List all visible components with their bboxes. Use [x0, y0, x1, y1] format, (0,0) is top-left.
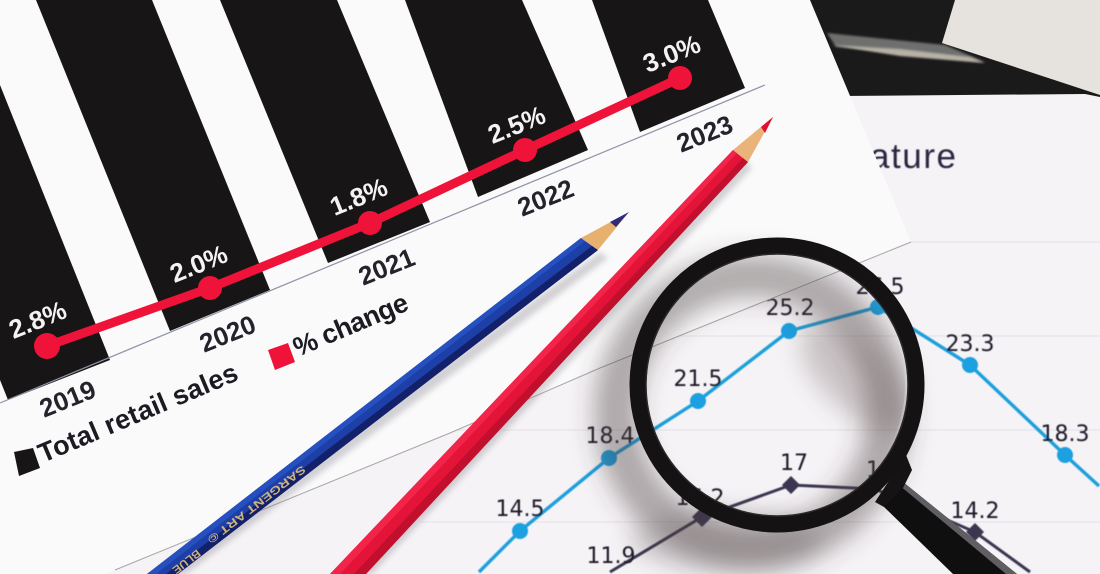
- blue line chart: 25.2: [766, 296, 814, 321]
- pencil highlight facet: [147, 238, 585, 574]
- handle collar: [875, 455, 912, 507]
- blue line chart: 18.3: [1041, 422, 1089, 447]
- pencil lead: [761, 117, 773, 133]
- blue line chart: 23.3: [946, 332, 994, 357]
- dark table background: [826, 32, 985, 64]
- legend swatch: total retail sales: [14, 448, 40, 476]
- dark line chart: [587, 451, 1030, 572]
- pencil lead: [610, 212, 629, 227]
- blue line chart: 18.4: [586, 424, 634, 449]
- legend text: percent change: % change: [289, 287, 413, 363]
- handle: [882, 482, 1017, 574]
- dark line chart: 11.9: [587, 544, 635, 569]
- bar 2021: [220, 0, 430, 263]
- lower sheet title fragment: ature: [870, 137, 956, 176]
- magnifier cast shadow: [616, 276, 888, 548]
- pencil highlight facet: [330, 150, 737, 574]
- year labels: 2022: [513, 173, 578, 222]
- percent labels: 1.8%: [326, 172, 392, 222]
- magnifying glass: [638, 246, 1017, 574]
- lower sheet grid lines: [420, 242, 1100, 522]
- blue line chart: 26.5: [856, 275, 904, 300]
- year labels: 2021: [354, 242, 419, 291]
- pencil imprint: BLUE: [170, 547, 202, 574]
- pencil shaded facet: [354, 158, 748, 574]
- legend: [14, 287, 413, 476]
- blue line chart: [479, 275, 1099, 572]
- corner card: [942, 0, 1100, 95]
- dark line chart: 16: [866, 458, 894, 483]
- handle highlight: [899, 482, 1017, 574]
- lens ring: [638, 246, 916, 524]
- percent labels: [5, 29, 705, 345]
- legend text: total retail sales: Total retail sales: [34, 357, 242, 469]
- year labels: 2020: [195, 309, 260, 358]
- dark line chart: 17: [780, 451, 808, 476]
- pencil imprint: [170, 463, 307, 574]
- top sheet edge: [115, 242, 911, 570]
- pencil shadows: [155, 160, 752, 574]
- bar 2022: [405, 0, 588, 197]
- top sheet: [0, 0, 910, 431]
- legend swatch: percent change: [268, 343, 295, 370]
- red pencil: [330, 117, 773, 574]
- bar 2019: [0, 85, 110, 400]
- year labels: [35, 109, 737, 423]
- blue line chart: 14.5: [496, 497, 544, 522]
- year labels: 2019: [35, 374, 100, 423]
- dark line chart: 14.2: [951, 499, 999, 524]
- year labels: 2023: [672, 109, 737, 158]
- pencil imprint: SARGENT ART ©: [205, 463, 307, 545]
- dark line chart: 15.2: [676, 486, 724, 511]
- pencil wood tip: [581, 212, 629, 250]
- bar 2020: [36, 0, 270, 331]
- chart axis: [0, 85, 765, 403]
- percent labels: 2.5%: [484, 100, 550, 150]
- pencil shaded facet: [166, 246, 598, 574]
- blue pencil: [147, 212, 629, 574]
- percent labels: 2.8%: [5, 295, 71, 345]
- pencil wood tip: [733, 117, 773, 162]
- red percent change line: [34, 66, 692, 359]
- bar 2023: [592, 0, 745, 132]
- percent labels: 3.0%: [639, 29, 705, 79]
- percent labels: 2.0%: [166, 239, 232, 289]
- blue line chart: 21.5: [674, 367, 722, 392]
- lens shading: [790, 317, 905, 436]
- bar chart: total retail sales: [0, 0, 745, 400]
- ground shadow below the ring: [630, 510, 820, 570]
